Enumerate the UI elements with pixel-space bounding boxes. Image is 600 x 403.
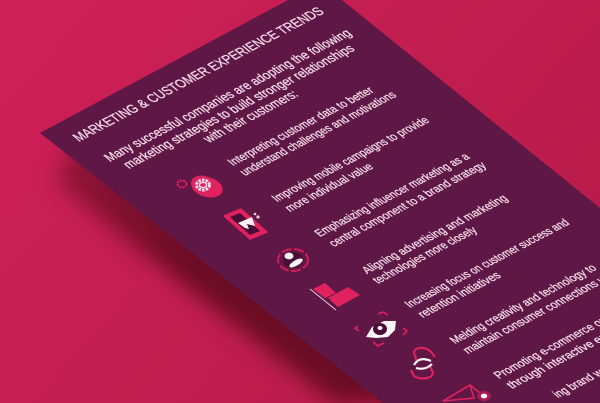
item 4 text: technologies more closely: [370, 224, 481, 286]
item 4 text: Aligning advertising and marketing: [359, 193, 511, 276]
icon: phone megaphone: [224, 209, 267, 239]
item 5 text: [402, 217, 573, 320]
item 1 text: Interpreting customer data to better: [225, 85, 377, 168]
item 3 text: central component to a brand strategy: [326, 159, 490, 249]
item 2 text: Improving mobile campaigns to provide: [269, 115, 432, 204]
item 2 text: [269, 115, 432, 214]
panel shadow: [58, 135, 430, 403]
icon: eye: [355, 312, 407, 346]
intro text: with their customers:: [198, 87, 302, 145]
icon: bar blocks: [310, 283, 360, 310]
item 5 text: retention initiatives: [415, 270, 504, 320]
icon: link arrows: [411, 348, 435, 378]
item 1 text: understand challenges and motivations: [237, 89, 400, 178]
item 3 text: Emphasizing influencer marketing as a: [312, 151, 473, 239]
icon: person target: [278, 249, 308, 271]
item 2 text: more individual value: [282, 161, 376, 214]
intro text: marketing strategies to build stronger relationships: [119, 42, 358, 171]
icon: envelope: [443, 385, 491, 401]
intro text: Many successful companies are adopting the following: [100, 26, 355, 164]
icon: gears: [178, 173, 225, 201]
